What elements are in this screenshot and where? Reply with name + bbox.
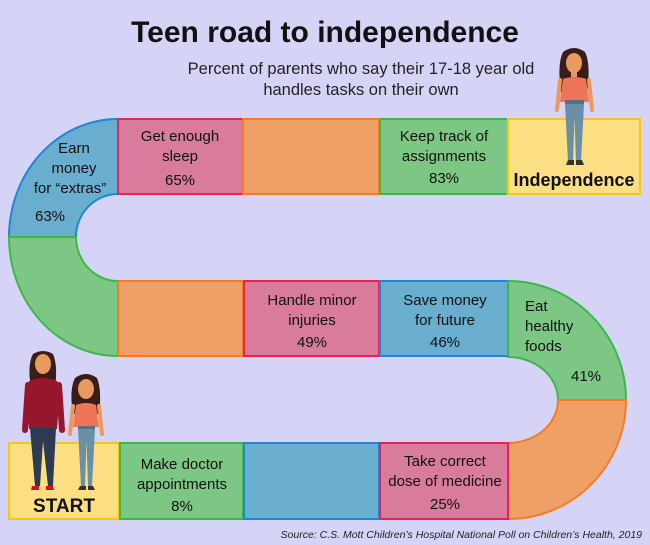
tile: get enough sleep: 65% [165, 172, 195, 189]
source note: Source: C.S. Mott Children’s Hospital National Poll on Children’s Health, 2019 [281, 529, 642, 541]
tile: earn money (blue curve): money [51, 160, 97, 177]
figure: parent at start [25, 351, 62, 490]
tile: keep track: Keep track of [400, 128, 489, 145]
tile: earn money (blue curve): Earn [58, 140, 90, 157]
tile: independence: Independence [513, 170, 635, 190]
tile: orange right curve [508, 400, 626, 519]
tile: earn money (blue curve) [9, 119, 118, 237]
tile: eat healthy foods (green curve): 41% [571, 368, 601, 385]
tile: orange blank [243, 119, 379, 194]
subtitle [188, 60, 534, 99]
tile: make doctor appointments [120, 443, 243, 519]
tile: eat healthy foods (green curve): foods [525, 338, 562, 355]
figure: teen at start [70, 374, 102, 490]
tile: earn money (blue curve): 63% [35, 208, 65, 225]
tile: make doctor appointments: appointments [137, 476, 227, 493]
tile: get enough sleep: Get enough [141, 128, 219, 145]
tile: start [9, 443, 119, 519]
tile: take correct dose: dose of medicine [388, 473, 502, 490]
tile: handle minor injuries: injuries [288, 312, 336, 329]
tile: handle minor injuries: Handle minor [267, 292, 357, 309]
tile: handle minor injuries [244, 281, 379, 356]
subtitle: handles tasks on their own [263, 81, 459, 99]
tile: get enough sleep: sleep [162, 148, 198, 165]
tile: take correct dose: Take correct [404, 453, 487, 470]
road: top row [9, 119, 640, 519]
tile: take correct dose: 25% [430, 496, 460, 513]
tile: orange middle blank [118, 281, 243, 356]
tile: eat healthy foods (green curve): healthy [525, 318, 574, 335]
tile: save money: 46% [430, 334, 460, 351]
tile: green left curve [9, 237, 118, 356]
tile: independence [508, 119, 640, 194]
tile: take correct dose [380, 443, 508, 519]
tile: get enough sleep [118, 119, 243, 194]
tile: start: START [33, 496, 95, 517]
tile: handle minor injuries: 49% [297, 334, 327, 351]
figure: teen at independence [557, 48, 592, 165]
tile: eat healthy foods (green curve) [508, 281, 626, 400]
tile: save money [380, 281, 508, 356]
tile: earn money (blue curve): for “extras” [34, 180, 106, 197]
tile: keep track [380, 119, 508, 194]
tile: save money: Save money [403, 292, 487, 309]
tile: keep track: assignments [402, 148, 486, 165]
tile: save money: for future [415, 312, 475, 329]
tile: make doctor appointments: 8% [171, 498, 193, 515]
title: Teen road to independence [131, 16, 519, 49]
tile: blue blank [244, 443, 379, 519]
subtitle: Percent of parents who say their 17-18 year old [188, 60, 534, 78]
tile: eat healthy foods (green curve): Eat [525, 298, 548, 315]
tile: make doctor appointments: Make doctor [141, 456, 223, 473]
tile: keep track: 83% [429, 170, 459, 187]
